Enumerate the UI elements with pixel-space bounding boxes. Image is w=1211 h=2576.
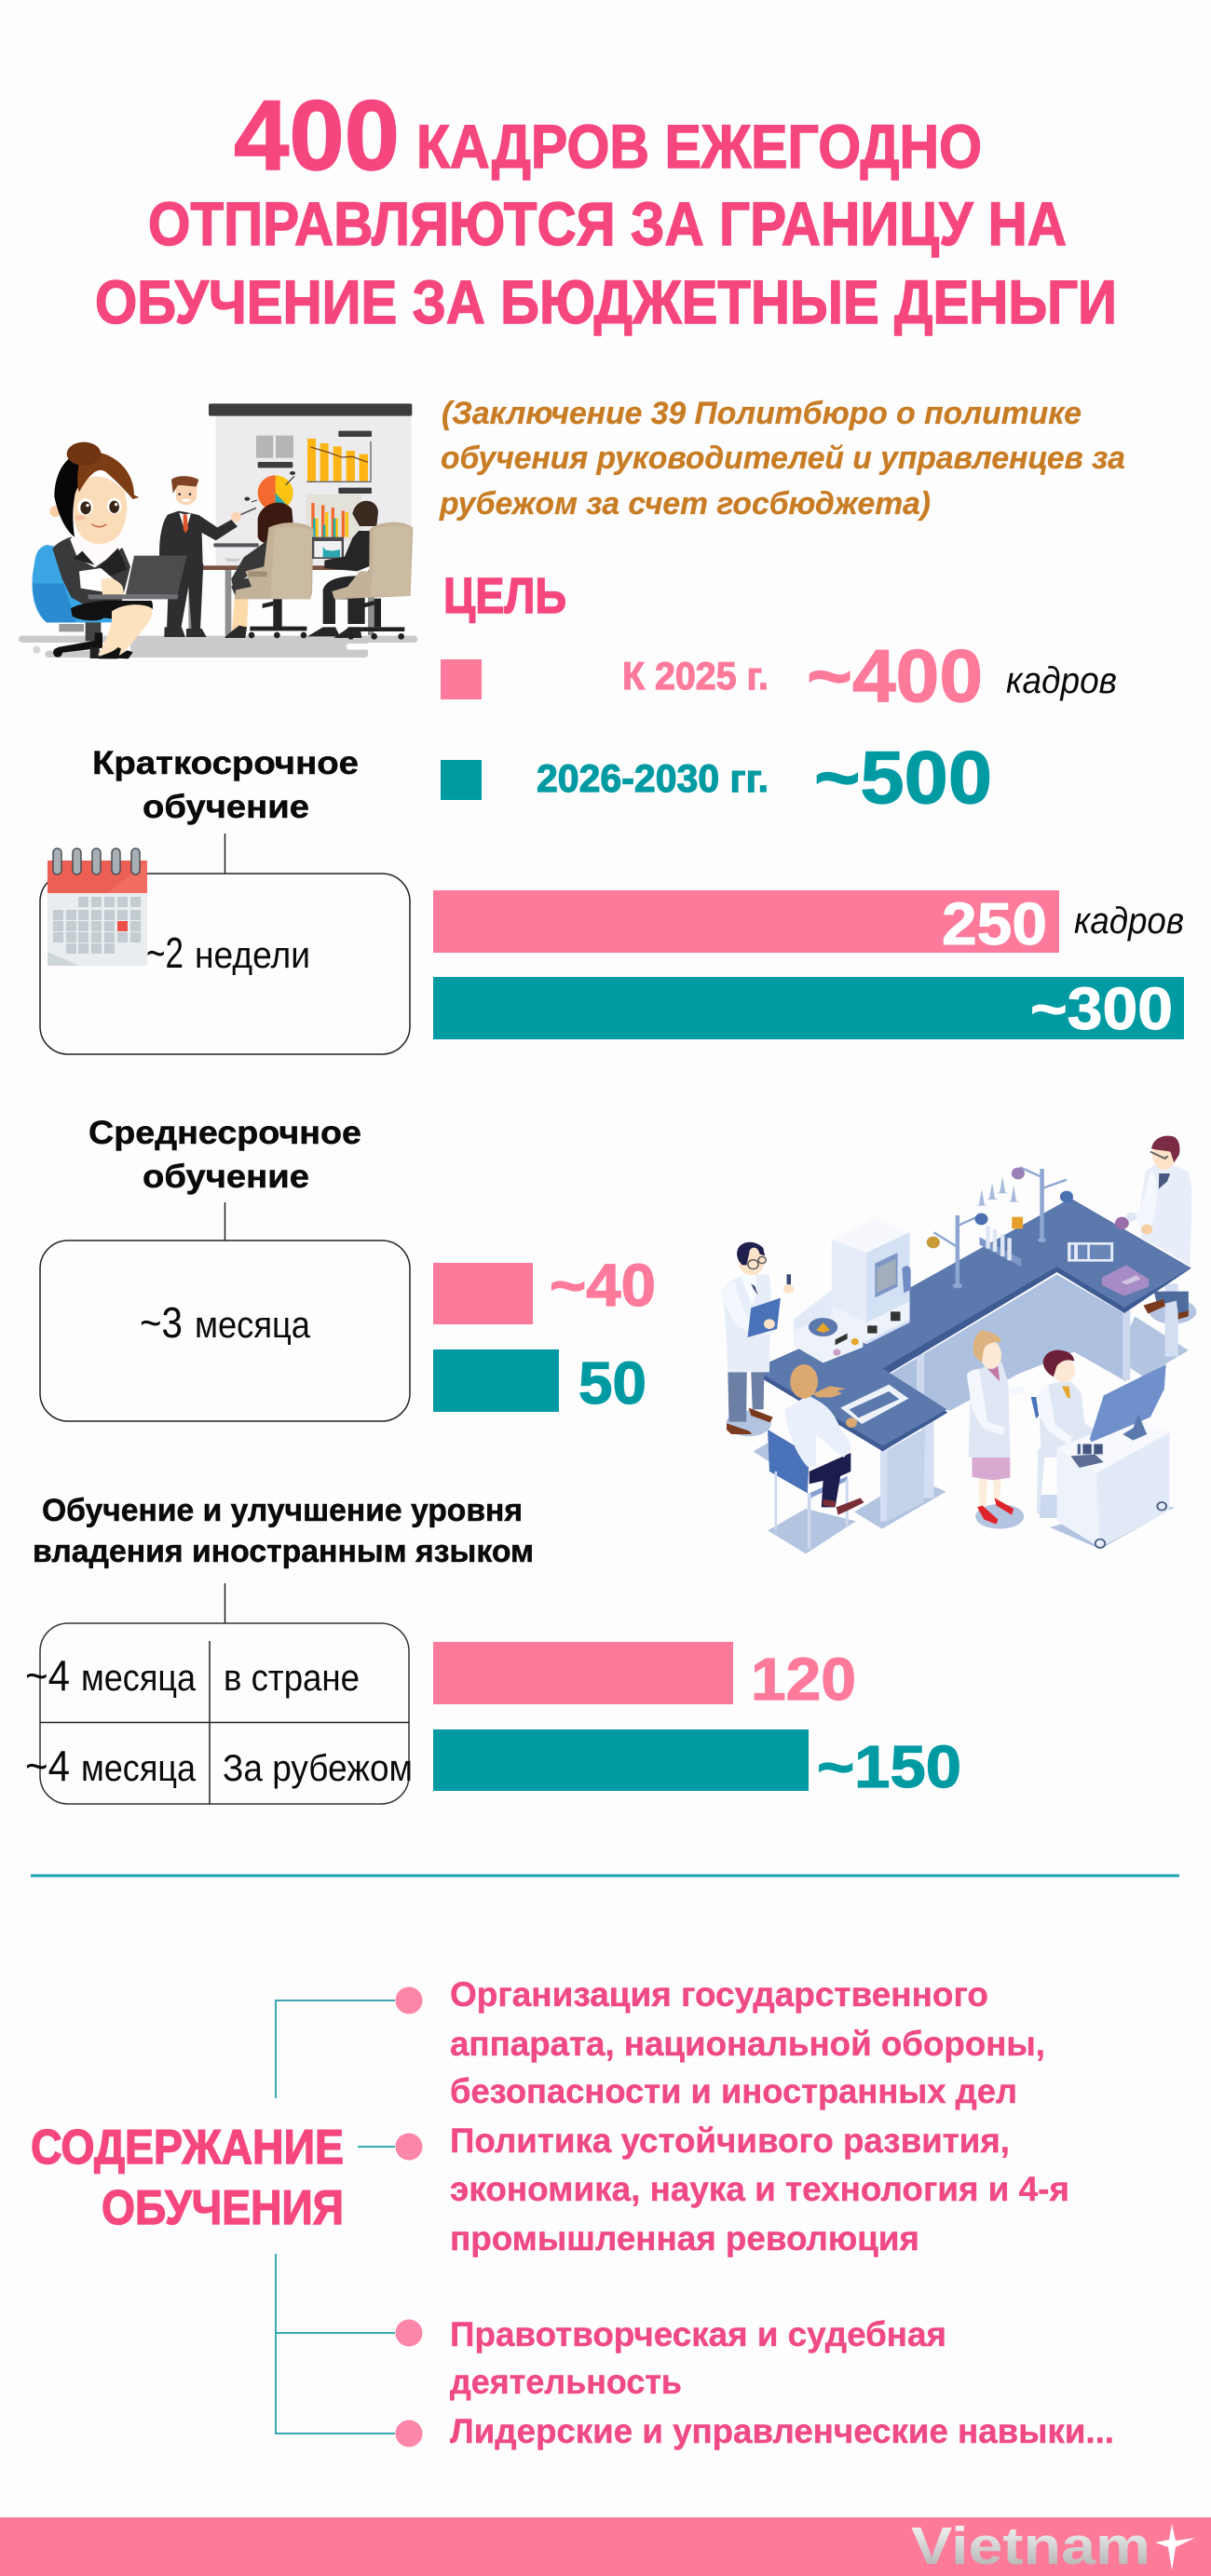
chart: language bars: 120 — [751, 1646, 856, 1713]
chart: language bars — [433, 1642, 961, 1800]
panel: language training — [25, 1493, 534, 1804]
logo: Vietnam+: Vietnam — [911, 2516, 1150, 2576]
heading: training content: СОДЕРЖАНИЕ — [31, 2121, 344, 2175]
legend: 2026-2030 — [441, 736, 992, 819]
panel: mid-term training: ~3 — [140, 1298, 183, 1347]
subtitle note: (Заключение 39 Политбюро о политике — [442, 396, 1082, 431]
list: training topics: Правотворческая и судебная — [450, 2315, 946, 2353]
title: ОТПРАВЛЯЮТСЯ ЗА ГРАНИЦУ НА — [148, 189, 1067, 258]
panel: language training: в стране — [224, 1658, 360, 1699]
panel: short-term training: обучение — [143, 789, 309, 825]
sub: seated technician — [768, 1364, 908, 1549]
panel: short-term training: недели — [195, 935, 310, 976]
sub: scientist with clipboard — [721, 1242, 794, 1434]
list: training topics: экономика, наука и технология и 4-я — [450, 2170, 1069, 2208]
panel: language training: ~4 — [25, 1651, 70, 1700]
list: training topics: Организация государственного — [450, 1975, 988, 2013]
list: training topics: аппарата, национальной обороны, — [450, 2025, 1045, 2063]
list: training topics: безопасности и иностранных дел — [450, 2072, 1017, 2110]
panel: language training: Обучение и улучшение уровня — [42, 1493, 523, 1528]
connector tree — [276, 1987, 423, 2447]
panel: mid-term training: обучение — [143, 1159, 309, 1195]
panel: language training: месяца — [81, 1748, 197, 1789]
chart: language bars: ~150 — [817, 1733, 961, 1800]
list: training topics: деятельность — [450, 2363, 682, 2401]
sub: seated woman at computer — [1031, 1350, 1169, 1548]
panel: mid-term training: месяца — [195, 1305, 311, 1346]
panel: language training: ~4 — [25, 1742, 70, 1790]
legend: by 2025 — [441, 634, 1117, 717]
title: КАДРОВ ЕЖЕГОДНО — [416, 112, 982, 181]
list: training topics: промышленная революция — [450, 2219, 919, 2257]
heading: goal: ЦЕЛЬ — [443, 568, 566, 624]
icon: calendar — [48, 848, 147, 966]
chart: short-term bars — [433, 890, 1184, 1042]
panel: mid-term training: Среднесрочное — [88, 1115, 361, 1151]
list: training topics: Лидерские и управленческие навыки... — [450, 2412, 1114, 2450]
illustration: office presentation — [19, 403, 417, 658]
panel: short-term training — [40, 745, 410, 1054]
subtitle note — [439, 396, 1125, 522]
chart: mid-term bars: 50 — [578, 1349, 646, 1417]
subtitle note: рубежом за счет госбюджета) — [439, 486, 931, 522]
illustration: laboratory — [721, 1136, 1196, 1553]
chart: short-term bars: ~300 — [1030, 975, 1173, 1042]
footer band — [0, 2516, 1211, 2576]
chart: short-term bars: 250 — [942, 890, 1047, 957]
legend: 2026-2030: ~500 — [814, 736, 992, 819]
sub: scientist with goggles — [1115, 1136, 1192, 1320]
sub: incubator and centrifuge — [794, 1218, 911, 1363]
title — [95, 79, 1117, 336]
legend: by 2025: К 2025 г. — [622, 654, 769, 698]
legend: by 2025: ~400 — [807, 634, 983, 717]
legend: by 2025: кадров — [1006, 660, 1117, 701]
chart: short-term bars: кадров — [1074, 901, 1184, 942]
title: 400 — [234, 79, 400, 191]
list: training topics: Политика устойчивого развития, — [450, 2122, 1010, 2160]
list: training topics — [450, 1975, 1114, 2450]
chart: mid-term bars: ~40 — [550, 1252, 656, 1319]
panel: language training: месяца — [81, 1658, 197, 1699]
sub: lab glassware and instruments — [927, 1167, 1149, 1296]
panel: mid-term training — [40, 1115, 410, 1421]
heading: training content — [31, 2121, 344, 2235]
sub: standing woman — [967, 1330, 1026, 1525]
heading: training content: ОБУЧЕНИЯ — [102, 2181, 344, 2235]
panel: language training: владения иностранным языком — [33, 1534, 534, 1569]
panel: language training: За рубежом — [223, 1748, 413, 1789]
subtitle note: обучения руководителей и управленцев за — [441, 441, 1125, 476]
panel: short-term training: ~2 — [146, 929, 184, 977]
legend: 2026-2030: 2026-2030 гг. — [537, 756, 769, 800]
panel: short-term training: Краткосрочное — [92, 745, 359, 781]
chart: mid-term bars — [433, 1252, 656, 1417]
